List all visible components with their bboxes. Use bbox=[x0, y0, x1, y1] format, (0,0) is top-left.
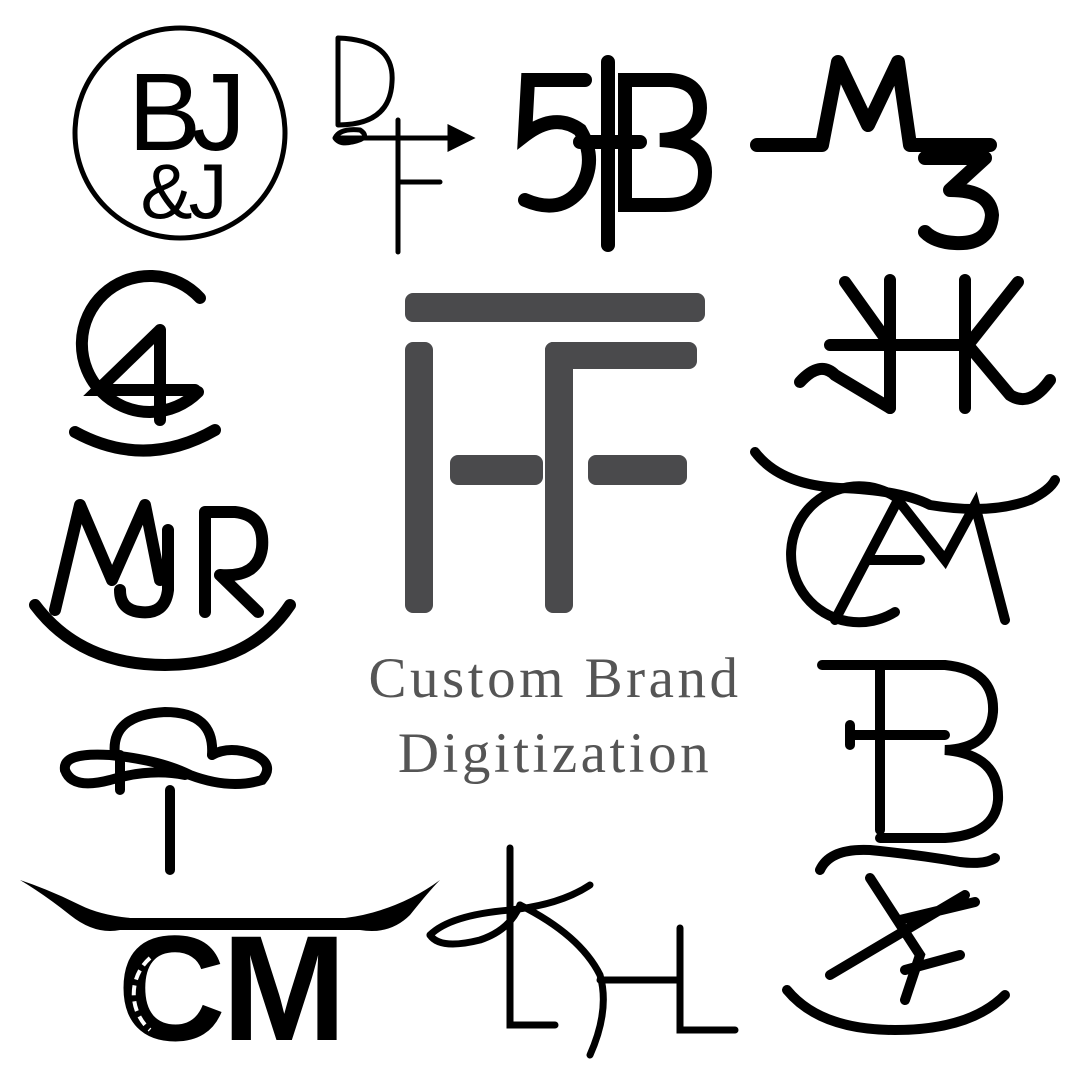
brand: DF arrow bbox=[335, 38, 470, 252]
brand: TB bbox=[820, 665, 998, 870]
title text bbox=[369, 647, 741, 785]
brand: HK bbox=[800, 280, 1050, 408]
brand: BJ&J circle: BJ bbox=[128, 51, 238, 174]
brand: M3 bbox=[757, 62, 992, 243]
brand: hat T bbox=[65, 712, 267, 870]
brand: MJR bbox=[35, 505, 290, 665]
center logo IF bbox=[405, 293, 705, 613]
brand: 5B bbox=[525, 62, 705, 245]
brand: CM longhorn: CM bbox=[117, 904, 343, 1072]
brand: BJ&J circle: &J bbox=[140, 147, 224, 235]
brand: BJ&J circle bbox=[75, 28, 285, 238]
brand: CM longhorn bbox=[20, 880, 440, 1072]
brand: CM horns bbox=[755, 452, 1055, 622]
brand: XF bbox=[787, 878, 1005, 1030]
title text: Digitization bbox=[398, 722, 712, 785]
title text: Custom Brand bbox=[369, 647, 741, 710]
brand: C4 bbox=[75, 276, 215, 451]
brand: KHL bbox=[430, 848, 735, 1055]
